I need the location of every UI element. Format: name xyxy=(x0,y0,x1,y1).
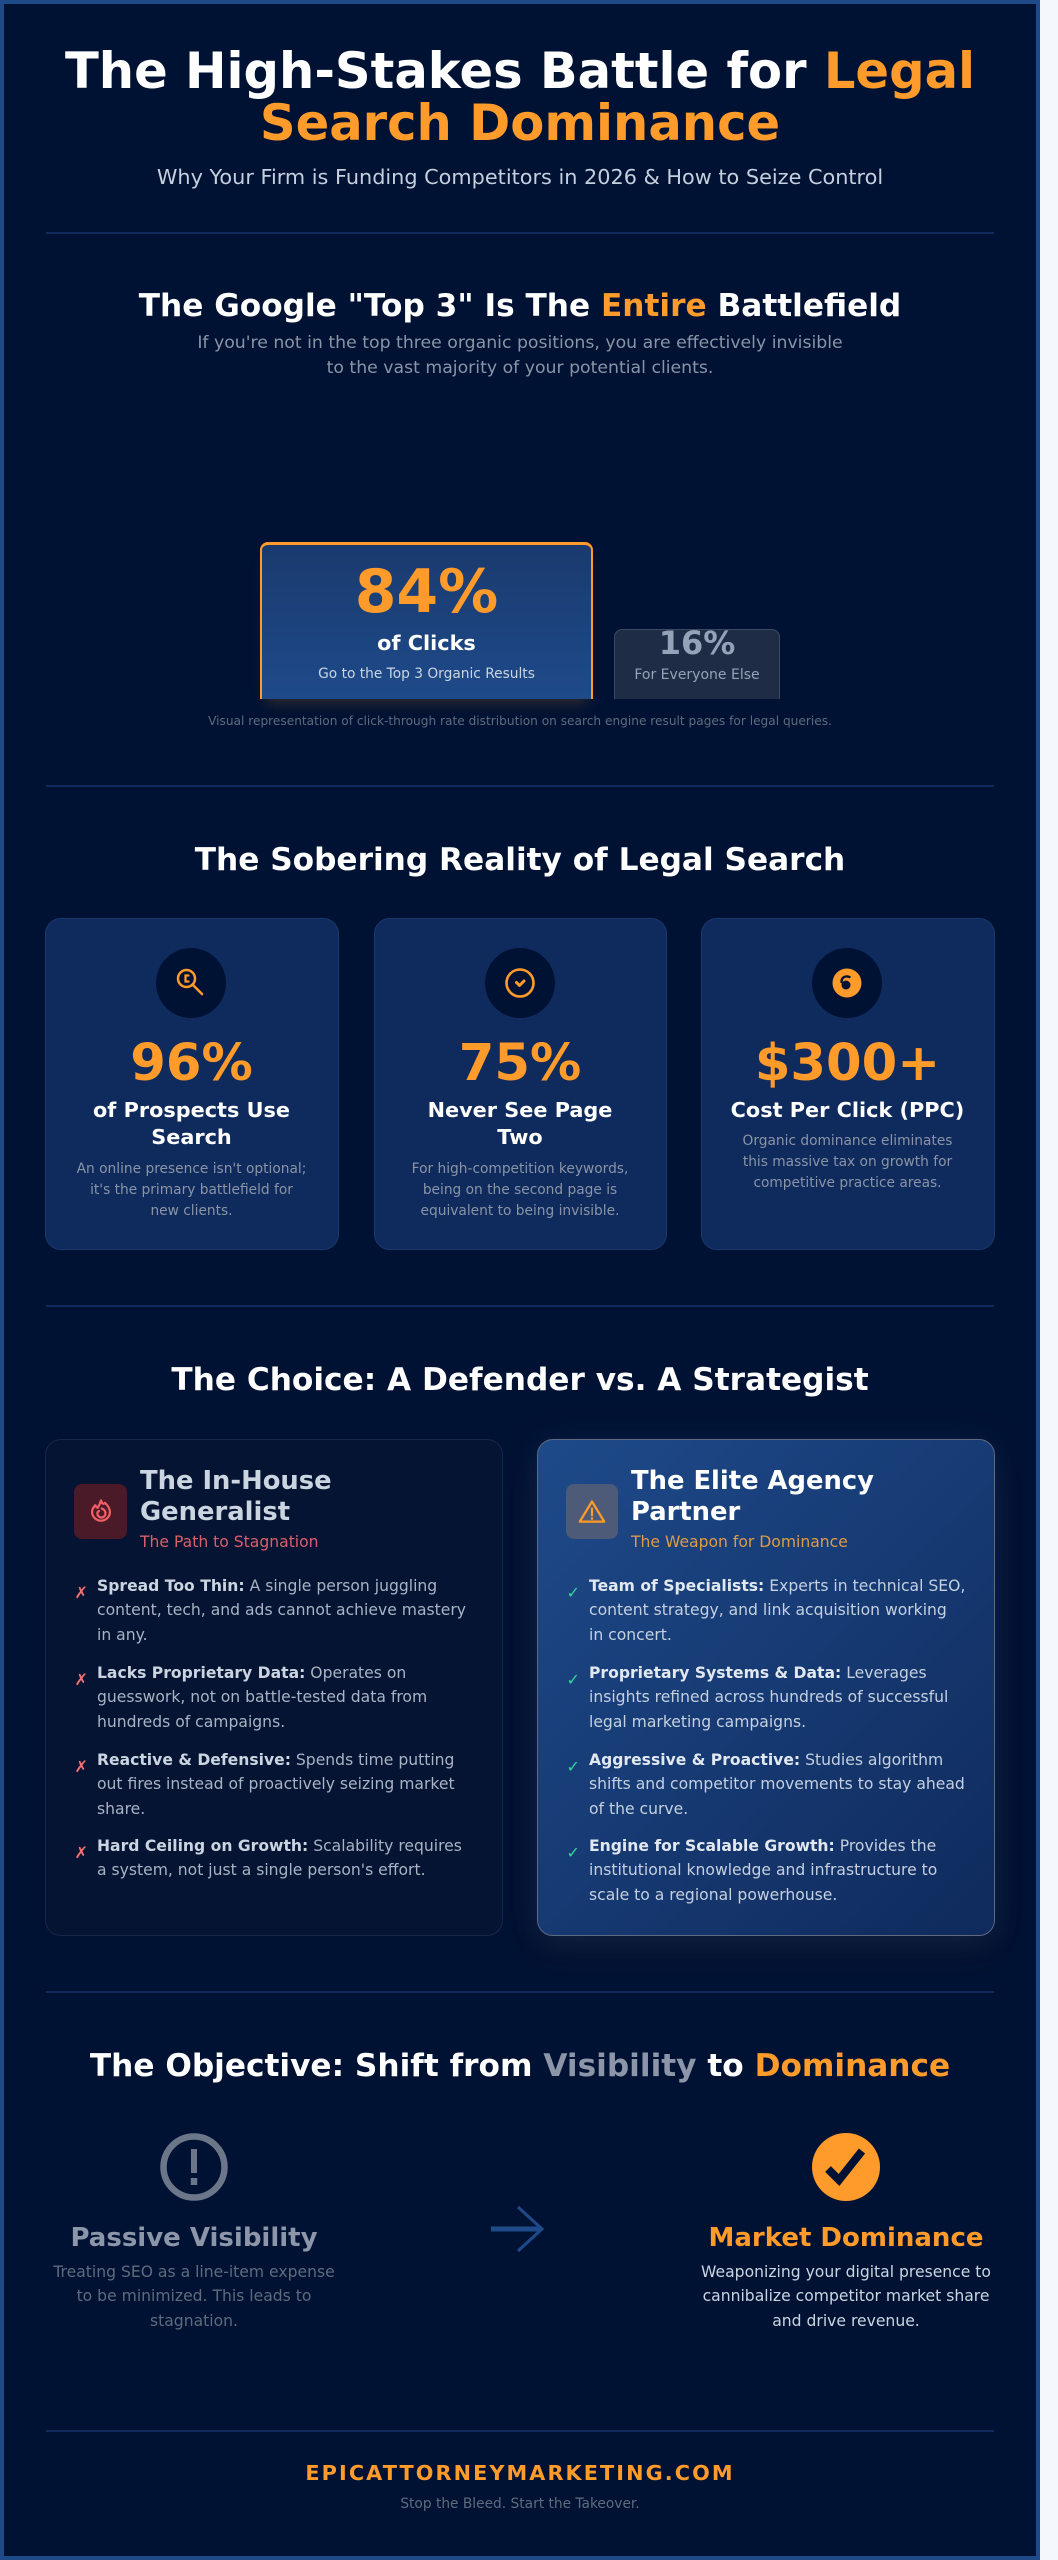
section intro: to the vast majority of your potential clients. xyxy=(327,358,713,378)
bar chart: click distribution xyxy=(260,542,780,710)
stat card: 75 percent xyxy=(374,918,667,1250)
list item: hard ceiling: ✗ xyxy=(74,1843,88,1862)
column text: Weaponizing your digital presence to xyxy=(701,2263,991,2281)
list item: engine: institutional knowledge and infrastructure to xyxy=(589,1861,937,1879)
list item: reactive xyxy=(74,1751,455,1818)
list item: proprietary systems: legal marketing campaigns. xyxy=(589,1713,806,1731)
subtitle: Why Your Firm is Funding Competitors in 2026 & How to Seize Control xyxy=(157,164,883,188)
list item: lacks data xyxy=(74,1664,427,1731)
panel: passive visibility xyxy=(53,2133,335,2330)
list item: specialists: ✓ xyxy=(566,1583,580,1602)
chart caption: Visual representation of click-through rate distribution on search engine result pages for legal queries. xyxy=(208,714,832,728)
icon: flame xyxy=(74,1484,127,1539)
stat value: 96% xyxy=(130,1033,253,1093)
section intro xyxy=(197,333,843,378)
list item: lacks data: ✗ xyxy=(74,1670,88,1689)
list item: reactive: out fires instead of proactively seizing market xyxy=(97,1775,455,1793)
list item: reactive: Reactive & Defensive: Spends time putting xyxy=(97,1751,454,1769)
bar: 16 percent: 16% xyxy=(659,624,735,662)
list item: spread too thin: ✗ xyxy=(74,1583,88,1602)
list item: specialists: content strategy, and link acquisition working xyxy=(589,1601,947,1619)
stat label xyxy=(93,1098,290,1149)
panel: in-house generalist xyxy=(45,1439,503,1936)
panel subtitle: The Path to Stagnation xyxy=(140,1533,319,1551)
stat description: equivalent to being invisible. xyxy=(421,1203,619,1219)
section intro: If you're not in the top three organic positions, you are effectively invisible xyxy=(197,333,843,353)
footer tagline: Stop the Bleed. Start the Takeover. xyxy=(400,2496,640,2512)
list item: engine: scale to a regional powerhouse. xyxy=(589,1886,837,1904)
column text: to be minimized. This leads to xyxy=(77,2287,311,2305)
bar: 16 percent: For Everyone Else xyxy=(634,667,760,683)
list item: engine: Engine for Scalable Growth: Provides the xyxy=(589,1837,936,1855)
stat description: For high-competition keywords, xyxy=(412,1161,628,1177)
stat card: 96 percent xyxy=(45,918,338,1250)
panel: market dominance xyxy=(701,2133,991,2330)
list item: hard ceiling xyxy=(74,1837,462,1879)
bar: 16 percent xyxy=(614,629,780,699)
column heading: Passive Visibility xyxy=(70,2223,318,2253)
panel subtitle: The Weapon for Dominance xyxy=(631,1533,848,1551)
stat description xyxy=(412,1161,628,1219)
list item: engine: ✓ xyxy=(566,1843,580,1862)
stat label: Two xyxy=(497,1125,543,1149)
panel: elite agency partner xyxy=(537,1439,995,1936)
stat description: it's the primary battlefield for xyxy=(90,1182,293,1198)
icon: clock check xyxy=(484,948,554,1018)
panel heading: The Elite Agency xyxy=(631,1466,874,1496)
bar: 84 percent: 84% xyxy=(355,557,498,627)
list item: lacks data: guesswork, not on battle-tested data from xyxy=(97,1688,427,1706)
title: The High-Stakes Battle for Legal xyxy=(65,42,975,100)
stat label: Never See Page xyxy=(428,1098,612,1122)
panel heading: The In-House xyxy=(140,1466,332,1496)
section heading: top 3: The Google "Top 3" Is The Entire Battlefield xyxy=(139,288,901,324)
list item: aggressive: of the curve. xyxy=(589,1800,688,1818)
list item: lacks data: hundreds of campaigns. xyxy=(97,1713,285,1731)
list item: specialists: Team of Specialists: Experts in technical SEO, xyxy=(589,1577,965,1595)
stat value: $300+ xyxy=(755,1033,940,1093)
stat description xyxy=(76,1161,306,1219)
column text xyxy=(53,2263,335,2330)
list item: aggressive: shifts and competitor movements to stay ahead xyxy=(589,1775,965,1793)
column heading: Market Dominance xyxy=(708,2223,984,2253)
panel heading: Partner xyxy=(631,1497,740,1527)
section heading: the choice: The Choice: A Defender vs. A Strategist xyxy=(171,1362,869,1398)
stat label: Search xyxy=(151,1125,232,1149)
list item: proprietary systems: ✓ xyxy=(566,1670,580,1689)
list item: aggressive xyxy=(566,1751,965,1818)
list item: lacks data: Lacks Proprietary Data: Operates on xyxy=(97,1664,406,1682)
stat description: this massive tax on growth for xyxy=(743,1154,952,1170)
footer brand: EPICATTORNEYMARKETING.COM xyxy=(305,2461,735,2485)
list item: spread too thin: Spread Too Thin: A single person juggling xyxy=(97,1577,437,1595)
bar: 84 percent: of Clicks xyxy=(377,631,476,655)
stat description: new clients. xyxy=(150,1203,233,1219)
stat label xyxy=(428,1098,612,1149)
list item: specialists xyxy=(566,1577,965,1644)
stat description xyxy=(743,1133,952,1191)
stat value: 75% xyxy=(459,1033,581,1093)
list item: aggressive: ✓ xyxy=(566,1757,580,1776)
stat description: An online presence isn't optional; xyxy=(77,1161,306,1177)
bar: 84 percent xyxy=(260,542,593,699)
stat description: competitive practice areas. xyxy=(753,1175,942,1191)
stat label: Cost Per Click (PPC) xyxy=(731,1098,964,1122)
panel heading xyxy=(140,1466,332,1527)
stat description: being on the second page is xyxy=(423,1182,617,1198)
bar: 84 percent: Go to the Top 3 Organic Results xyxy=(318,666,535,682)
list item: spread too thin xyxy=(74,1577,466,1644)
icon: coin xyxy=(812,948,882,1018)
column text xyxy=(701,2263,991,2330)
icon: exclamation circle xyxy=(160,2133,228,2201)
list item: proprietary systems: insights refined across hundreds of successful xyxy=(589,1688,948,1706)
section heading: the objective: The Objective: Shift from Visibility to Dominance xyxy=(90,2048,950,2084)
title xyxy=(65,42,975,152)
list item: spread too thin: in any. xyxy=(97,1626,148,1644)
list item: engine xyxy=(566,1837,937,1904)
column text: stagnation. xyxy=(150,2312,238,2330)
panel heading xyxy=(631,1466,874,1527)
panel heading: Generalist xyxy=(140,1497,290,1527)
icon: check circle xyxy=(812,2133,880,2201)
stat card: cost per click xyxy=(701,918,994,1250)
stat description: Organic dominance eliminates xyxy=(743,1133,952,1149)
column text: and drive revenue. xyxy=(772,2312,920,2330)
list item: proprietary systems xyxy=(566,1664,948,1731)
list item: reactive: ✗ xyxy=(74,1757,88,1776)
section heading: sobering reality: The Sobering Reality of Legal Search xyxy=(195,842,845,878)
title: Search Dominance xyxy=(260,94,780,152)
list item: hard ceiling: Hard Ceiling on Growth: Scalability requires xyxy=(97,1837,462,1855)
icon: warning triangle xyxy=(566,1484,618,1539)
list item: spread too thin: content, tech, and ads cannot achieve mastery xyxy=(97,1601,466,1619)
list item: aggressive: Aggressive & Proactive: Studies algorithm xyxy=(589,1751,943,1769)
list item: hard ceiling: a system, not just a single person's effort. xyxy=(97,1861,426,1879)
arrow xyxy=(491,2206,544,2252)
column text: cannibalize competitor market share xyxy=(703,2287,989,2305)
list item: specialists: in concert. xyxy=(589,1626,672,1644)
list item: proprietary systems: Proprietary Systems & Data: Leverages xyxy=(589,1664,927,1682)
icon: search xyxy=(156,948,226,1018)
column text: Treating SEO as a line-item expense xyxy=(53,2263,335,2281)
list item: reactive: share. xyxy=(97,1800,145,1818)
stat label: of Prospects Use xyxy=(93,1098,290,1122)
